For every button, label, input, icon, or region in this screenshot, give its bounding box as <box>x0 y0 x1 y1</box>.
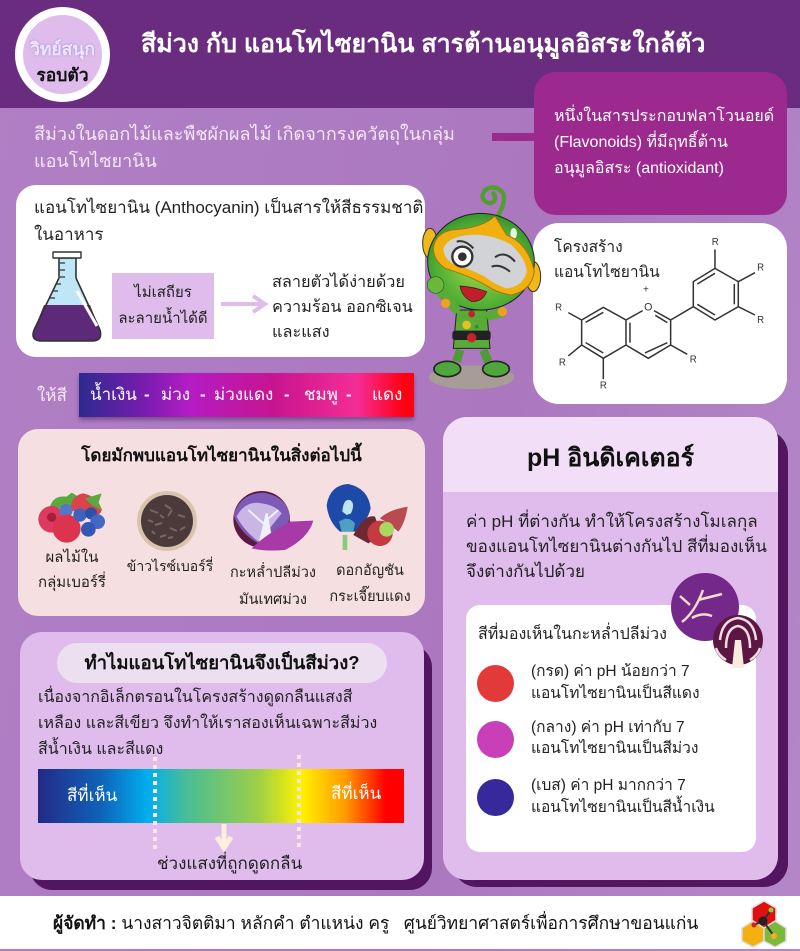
pH heading band <box>443 417 778 492</box>
seen label left: สีที่เห็น <box>67 786 117 805</box>
badge line 2: รอบตัว <box>36 65 89 85</box>
badge line 1: วิทย์สนุก <box>30 39 95 59</box>
label: berries: ผลไม้ใน <box>46 549 98 566</box>
chart: anthocyanin structure: R <box>690 354 697 365</box>
definition text: แอนโทไซยานิน (Anthocyanin) เป็นสารให้สีธรรมชาติ <box>34 198 423 217</box>
molecule label <box>554 238 660 281</box>
definition text: ในอาหาร <box>34 225 104 244</box>
chart: anthocyanin structure: R <box>712 237 719 248</box>
connector bar <box>492 133 536 141</box>
bar label: blue: น้ำเงิน <box>90 385 137 404</box>
bar label: pink: ชมพู <box>304 385 338 404</box>
panel heading: โดยมักพบแอนโทไซยานินในสิ่งต่อไปนี้ <box>81 446 362 465</box>
bar label: red: แดง <box>372 385 402 404</box>
neutral text <box>531 719 698 757</box>
colour gradient bar <box>79 373 414 417</box>
callout text: (Flavonoids) ที่มีฤทธิ์ต้าน <box>554 134 728 151</box>
neutral text: (กลาง) ค่า pH เท่ากับ 7 <box>531 719 685 736</box>
colour gradient bar: - <box>284 385 290 404</box>
unstable box: ไม่เสถียร <box>134 284 192 301</box>
label: berries: กลุ่มเบอร์รี่ <box>38 574 106 591</box>
absorbed label: ช่วงแสงที่ถูกดูดกลืน <box>157 854 302 873</box>
breakdown text: สลายตัวได้ง่ายด้วย <box>272 273 405 291</box>
panel: why purple <box>20 632 424 880</box>
label: riceberry: ข้าวไรซ์เบอร์รี่ <box>127 558 213 574</box>
seen label right: สีที่เห็น <box>331 784 381 803</box>
explanation text: สีน้ำเงิน และสีแดง <box>38 741 163 758</box>
chart: anthocyanin structure: R <box>559 358 566 369</box>
pH explanation <box>466 510 767 581</box>
intro text: แอนโทไซยานิน <box>34 151 157 171</box>
pH explanation: ของแอนโทไซยานินต่างกันไป สีที่มองเห็น <box>466 537 767 556</box>
chart: anthocyanin structure: R <box>600 381 607 392</box>
acid text <box>531 663 700 702</box>
label: gives colour: ให้สี <box>37 386 67 405</box>
chart: anthocyanin structure: R <box>757 263 764 274</box>
molecule label: แอนโทไซยานิน <box>554 264 660 281</box>
label: berries <box>38 548 106 592</box>
main title: สีม่วง กับ แอนโทไซยานิน สารต้านอนุมูลอิสระใกล้ตัว <box>141 30 705 58</box>
dot: neutral <box>477 721 514 758</box>
callout text: หนึ่งในสารประกอบฟลาโวนอยด์ <box>554 108 774 125</box>
breakdown text <box>272 272 413 341</box>
panel: molecule <box>533 223 787 404</box>
explanation text <box>38 686 377 758</box>
label: butterfly pea, roselle: กระเจี๊ยบแดง <box>329 589 411 605</box>
callout text: อนุมูลอิสระ (antioxidant) <box>554 160 724 177</box>
bar label: purple: ม่วง <box>161 385 190 404</box>
panel: anthocyanin definition <box>16 185 425 357</box>
base text: แอนโทไซยานินเป็นสีน้ำเงิน <box>531 799 715 816</box>
label: cabbage, sweet potato: กะหล่ำปลีม่วง <box>230 565 316 581</box>
spectrum bar <box>38 769 404 823</box>
callout text <box>554 104 774 178</box>
explanation text: เหลือง และสีเขียว จึงทำให้เราสองเห็นเฉพาะสีม่วง <box>38 715 377 732</box>
pH explanation: ค่า pH ที่ต่างกัน ทำให้โครงสร้างโมเลกุล <box>466 512 758 531</box>
dot: acid <box>477 665 514 702</box>
panel shadow: pH <box>453 430 788 887</box>
neutral text: แอนโทไซยานินเป็นสีม่วง <box>531 740 698 757</box>
base text <box>531 777 715 816</box>
label: cabbage, sweet potato <box>230 562 316 608</box>
header band <box>0 0 800 108</box>
bar dashes <box>144 385 352 404</box>
molecule label: โครงสร้าง <box>554 239 623 256</box>
pH heading band: pH อินดิเคเตอร์ <box>527 444 694 472</box>
unstable box <box>112 273 214 339</box>
chart: anthocyanin structure: R <box>757 315 764 326</box>
callout: flavonoids <box>534 72 787 215</box>
colour gradient bar: - <box>346 385 352 404</box>
panel: where found <box>18 429 425 616</box>
label: butterfly pea, roselle: ดอกอัญชัน <box>336 563 404 579</box>
chart: anthocyanin structure: R <box>555 302 562 313</box>
definition text <box>34 197 423 244</box>
footer <box>0 896 800 949</box>
breakdown text: และแสง <box>272 323 330 341</box>
panel: pH indicator <box>443 417 778 880</box>
unstable box: ละลายน้ำได้ดี <box>118 310 208 327</box>
colour gradient bar: - <box>200 385 206 404</box>
panel shadow: why purple <box>30 645 432 890</box>
dot: base <box>477 779 514 816</box>
intro text: สีม่วงในดอกไม้และพืชผักผลไม้ เกิดจากรงควัตถุในกลุ่ม <box>34 124 455 144</box>
explanation text: เนื่องจากอิเล็กตรอนในโครงสร้างดูดกลืนแสงสี <box>38 689 352 706</box>
colour gradient bar: - <box>144 385 150 404</box>
heading pill: ทำไมแอนโทไซยานินจึงเป็นสีม่วง? <box>84 652 360 673</box>
pH explanation: จึงต่างกันไปด้วย <box>466 562 585 581</box>
chart: anthocyanin structure: + <box>643 285 649 296</box>
intro text <box>34 124 455 171</box>
label: cabbage, sweet potato: มันเทศม่วง <box>239 592 307 608</box>
acid text: (กรด) ค่า pH น้อยกว่า 7 <box>531 663 690 680</box>
chart: anthocyanin structure: O <box>644 301 652 313</box>
colours heading: สีที่มองเห็นในกะหล่ำปลีม่วง <box>478 626 667 643</box>
bar label: magenta: ม่วงแดง <box>214 385 273 404</box>
base text: (เบส) ค่า pH มากกว่า 7 <box>531 777 686 794</box>
breakdown text: ความร้อน ออกซิเจน <box>272 298 413 316</box>
acid text: แอนโทไซยานินเป็นสีแดง <box>531 685 700 702</box>
heading pill <box>57 643 387 683</box>
label: butterfly pea, roselle <box>329 563 411 605</box>
panel: colours seen <box>466 605 756 852</box>
badge <box>15 7 110 102</box>
credits: ผู้จัดทำ : นางสาวจิตติมา หลักคำ ตำแหน่ง ครู ศูนย์วิทยาศาสตร์เพื่อการศึกษาขอนแก่น <box>53 913 698 933</box>
